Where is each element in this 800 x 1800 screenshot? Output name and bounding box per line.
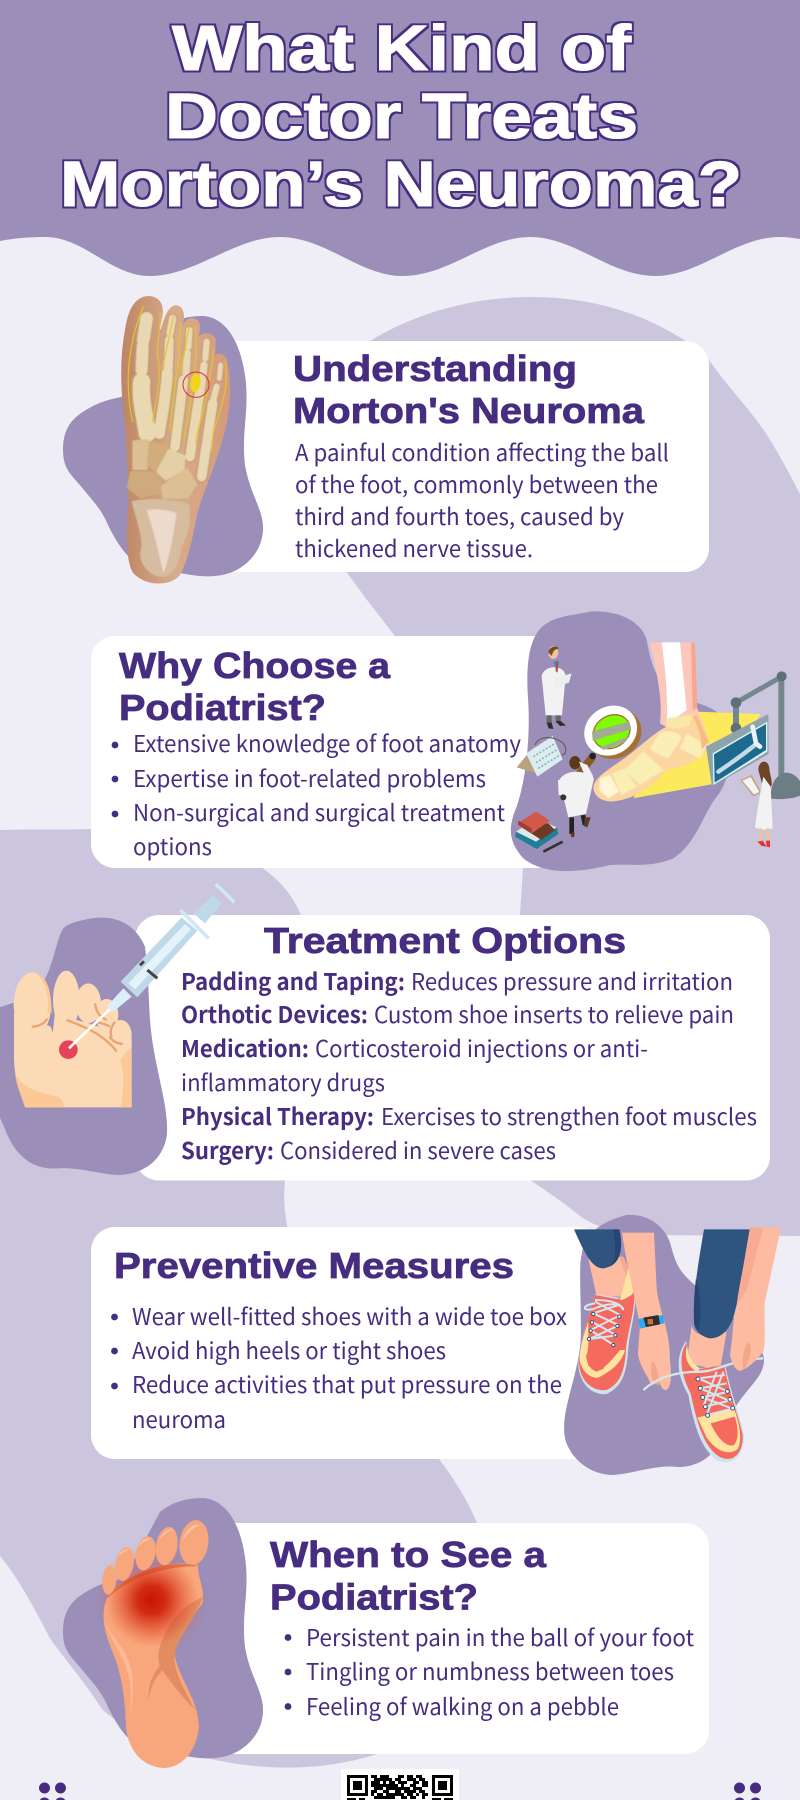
background blob: lower left	[0, 829, 500, 1768]
bullet list: Feeling of walking on a pebble	[306, 1688, 619, 1722]
text block: third and fourth toes, caused by	[295, 498, 624, 532]
qr code	[341, 1769, 459, 1800]
bullet list	[111, 1298, 568, 1435]
left shoe	[578, 1268, 635, 1394]
x-ray stand	[731, 671, 800, 799]
treatment list: Padding and Taping:	[181, 963, 405, 997]
blob behind podiatry illustration	[511, 611, 729, 871]
treatment list: Physical Therapy:	[181, 1098, 374, 1132]
panel: preventive measures	[91, 1215, 781, 1475]
bullet list: neuroma	[132, 1401, 226, 1435]
panel: understanding	[63, 296, 709, 584]
blob behind shoes	[564, 1215, 764, 1475]
bullet list: options	[133, 828, 212, 862]
icon: foot skeleton	[121, 296, 230, 584]
header band	[0, 0, 800, 276]
illustration: injection into foot	[14, 884, 234, 1107]
heading: Preventive Measures	[114, 1245, 514, 1286]
bullet list: Wear well-fitted shoes with a wide toe box	[132, 1298, 568, 1332]
right shoe	[679, 1341, 744, 1462]
bullet list: Tingling or numbness between toes	[306, 1653, 674, 1687]
text block: A painful condition affecting the ball	[295, 434, 669, 468]
x-ray screen	[706, 714, 769, 787]
title: Doctor Treats	[165, 80, 638, 152]
heading: Why Choose a	[119, 645, 391, 686]
heading: Morton's Neuroma	[293, 390, 645, 431]
heading: Treatment Options	[264, 920, 626, 961]
bullet list	[285, 1619, 694, 1722]
bullet list: Expertise in foot-related problems	[133, 760, 486, 794]
panel: why choose a podiatrist	[91, 611, 800, 871]
bullet list: Reduce activities that put pressure on the	[132, 1366, 562, 1400]
heading	[270, 1534, 547, 1618]
treatment list: Considered in severe cases	[280, 1132, 556, 1166]
panel: treatment options	[0, 884, 770, 1180]
treatment list: Exercises to strengthen foot muscles	[381, 1098, 757, 1132]
panel: when to see a podiatrist	[63, 1498, 709, 1768]
books	[515, 812, 563, 852]
text block: thickened nerve tissue.	[295, 530, 533, 564]
treatment list: Corticosteroid injections or anti-	[315, 1030, 648, 1064]
treatment list: Custom shoe inserts to relieve pain	[374, 996, 734, 1030]
blob behind foot skeleton	[63, 316, 263, 576]
right leg	[687, 1325, 727, 1370]
title: Morton’s Neuroma?	[60, 148, 742, 220]
treatment list: Reduces pressure and irritation	[411, 963, 733, 997]
bullet list: Non-surgical and surgical treatment	[133, 794, 505, 828]
illustration: tying shoelaces	[574, 1227, 781, 1462]
title: What Kind of	[172, 12, 632, 84]
bullet list	[112, 725, 521, 862]
footer dots left	[39, 1782, 66, 1800]
doctor right	[740, 762, 773, 847]
title	[60, 12, 742, 220]
heading: Podiatrist?	[119, 687, 326, 728]
doctor center	[559, 756, 594, 837]
background blob: upper right	[330, 297, 800, 1236]
treatment list: Surgery:	[181, 1132, 274, 1166]
heading	[119, 645, 391, 728]
heading: When to See a	[270, 1534, 547, 1575]
heading: Understanding	[293, 348, 577, 389]
calendar	[517, 736, 566, 777]
treatment list: Orthotic Devices:	[181, 996, 368, 1030]
footer dots right	[734, 1782, 761, 1800]
right arm	[730, 1227, 781, 1371]
treatment list	[181, 963, 757, 1166]
bullet list: Extensive knowledge of foot anatomy	[133, 725, 521, 759]
text block: of the foot, commonly between the	[295, 466, 658, 500]
treatment list: Medication:	[181, 1030, 309, 1064]
bullet list: Avoid high heels or tight shoes	[132, 1332, 446, 1366]
left arm and watch	[622, 1233, 671, 1390]
bullet list: Persistent pain in the ball of your foot	[306, 1619, 694, 1653]
heading	[293, 348, 645, 431]
illustration: sole with pain spot	[95, 1518, 211, 1768]
illustration: foot examination	[515, 642, 800, 852]
heading: Podiatrist?	[270, 1576, 478, 1618]
blob behind toes	[0, 918, 167, 1175]
text block	[295, 434, 669, 564]
treatment list: inflammatory drugs	[181, 1064, 385, 1098]
doctor left	[542, 646, 572, 729]
blob behind sole	[63, 1498, 263, 1758]
